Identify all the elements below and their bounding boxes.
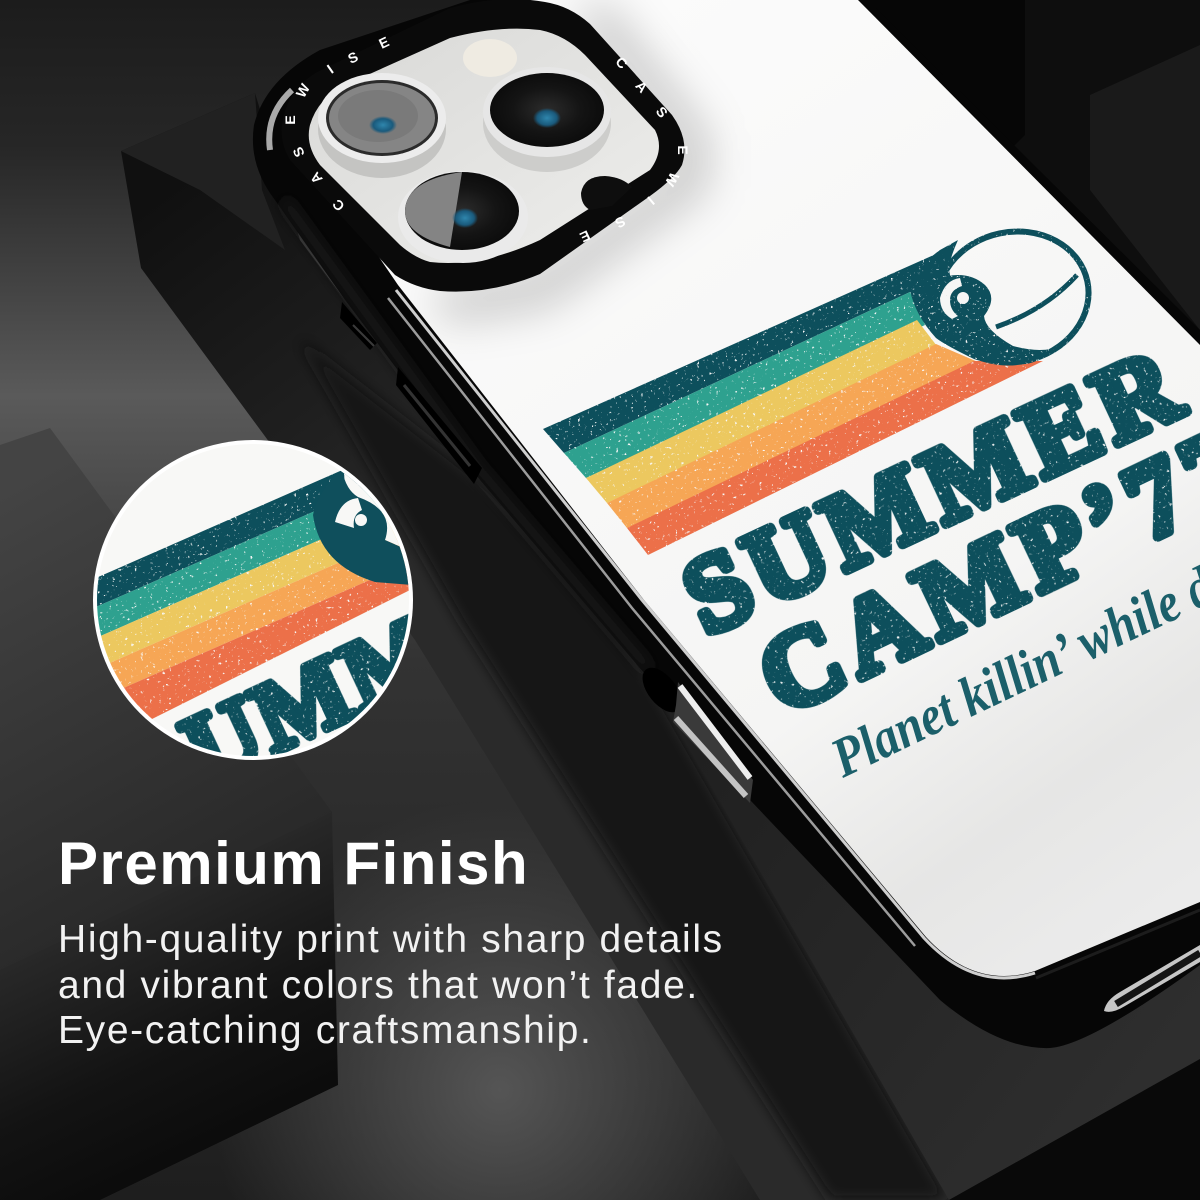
volume button (396, 367, 482, 484)
camera ring lettering: C (329, 196, 348, 214)
camera ring lettering: S (289, 144, 308, 160)
silver side button (673, 682, 753, 803)
body text: and vibrant colors that won’t fade. (58, 964, 699, 1006)
camera window (309, 29, 659, 263)
camera ring lettering: S (345, 48, 361, 67)
callout white notch (344, 474, 400, 546)
camera ring lettering (282, 33, 691, 246)
zoom callout circle (93, 440, 413, 760)
camera ring lettering: I (645, 193, 658, 208)
top right dark blocks (860, 0, 1200, 340)
camera ring lettering: W (292, 80, 313, 100)
body text: High-quality print with sharp details (58, 918, 724, 961)
lit floor glow (150, 760, 870, 1200)
camera ring lettering: E (282, 115, 298, 125)
callout planet core (335, 498, 367, 528)
camera ring lettering: A (632, 78, 651, 96)
callout lettering: UMME (166, 560, 525, 806)
lens: top right (483, 67, 611, 172)
camera ring lettering: E (675, 145, 691, 155)
flash (463, 39, 517, 77)
silver outer band (388, 298, 915, 946)
planet emblem (910, 228, 1092, 366)
camera ring lettering: E (577, 227, 593, 246)
callout stripes (97, 470, 409, 719)
top left glass rim (269, 90, 292, 150)
camera ring lettering: A (307, 169, 325, 187)
phone back print area (340, 0, 1200, 976)
left lower block (0, 428, 338, 1200)
module shadow (440, 10, 690, 305)
lower case rim (1036, 910, 1200, 978)
camera ring lettering: E (376, 33, 392, 52)
callout planet (313, 470, 412, 585)
headline: SUMMER: SUMMER (666, 325, 1197, 658)
body text: Eye-catching craftsmanship. (58, 1009, 592, 1052)
camera ring lettering: S (653, 103, 671, 121)
heading: Premium Finish (58, 830, 529, 897)
lens: top left (318, 73, 446, 178)
rainbow stripes (543, 250, 1043, 555)
camera module (282, 0, 691, 292)
phone case (253, 0, 1200, 1048)
lens: bottom (398, 171, 528, 263)
camera ring lettering: C (612, 54, 631, 72)
silver edge line (396, 290, 1035, 978)
small side switch (340, 302, 377, 350)
side button notch (635, 661, 689, 719)
camera ring lettering: S (612, 213, 628, 232)
bottom port (1104, 945, 1200, 1012)
camera ring lettering: W (662, 170, 683, 190)
body text (58, 918, 724, 1052)
camera ring lettering: I (324, 61, 336, 77)
lidar sensor (581, 176, 632, 210)
summer camp artwork (440, 10, 1200, 790)
